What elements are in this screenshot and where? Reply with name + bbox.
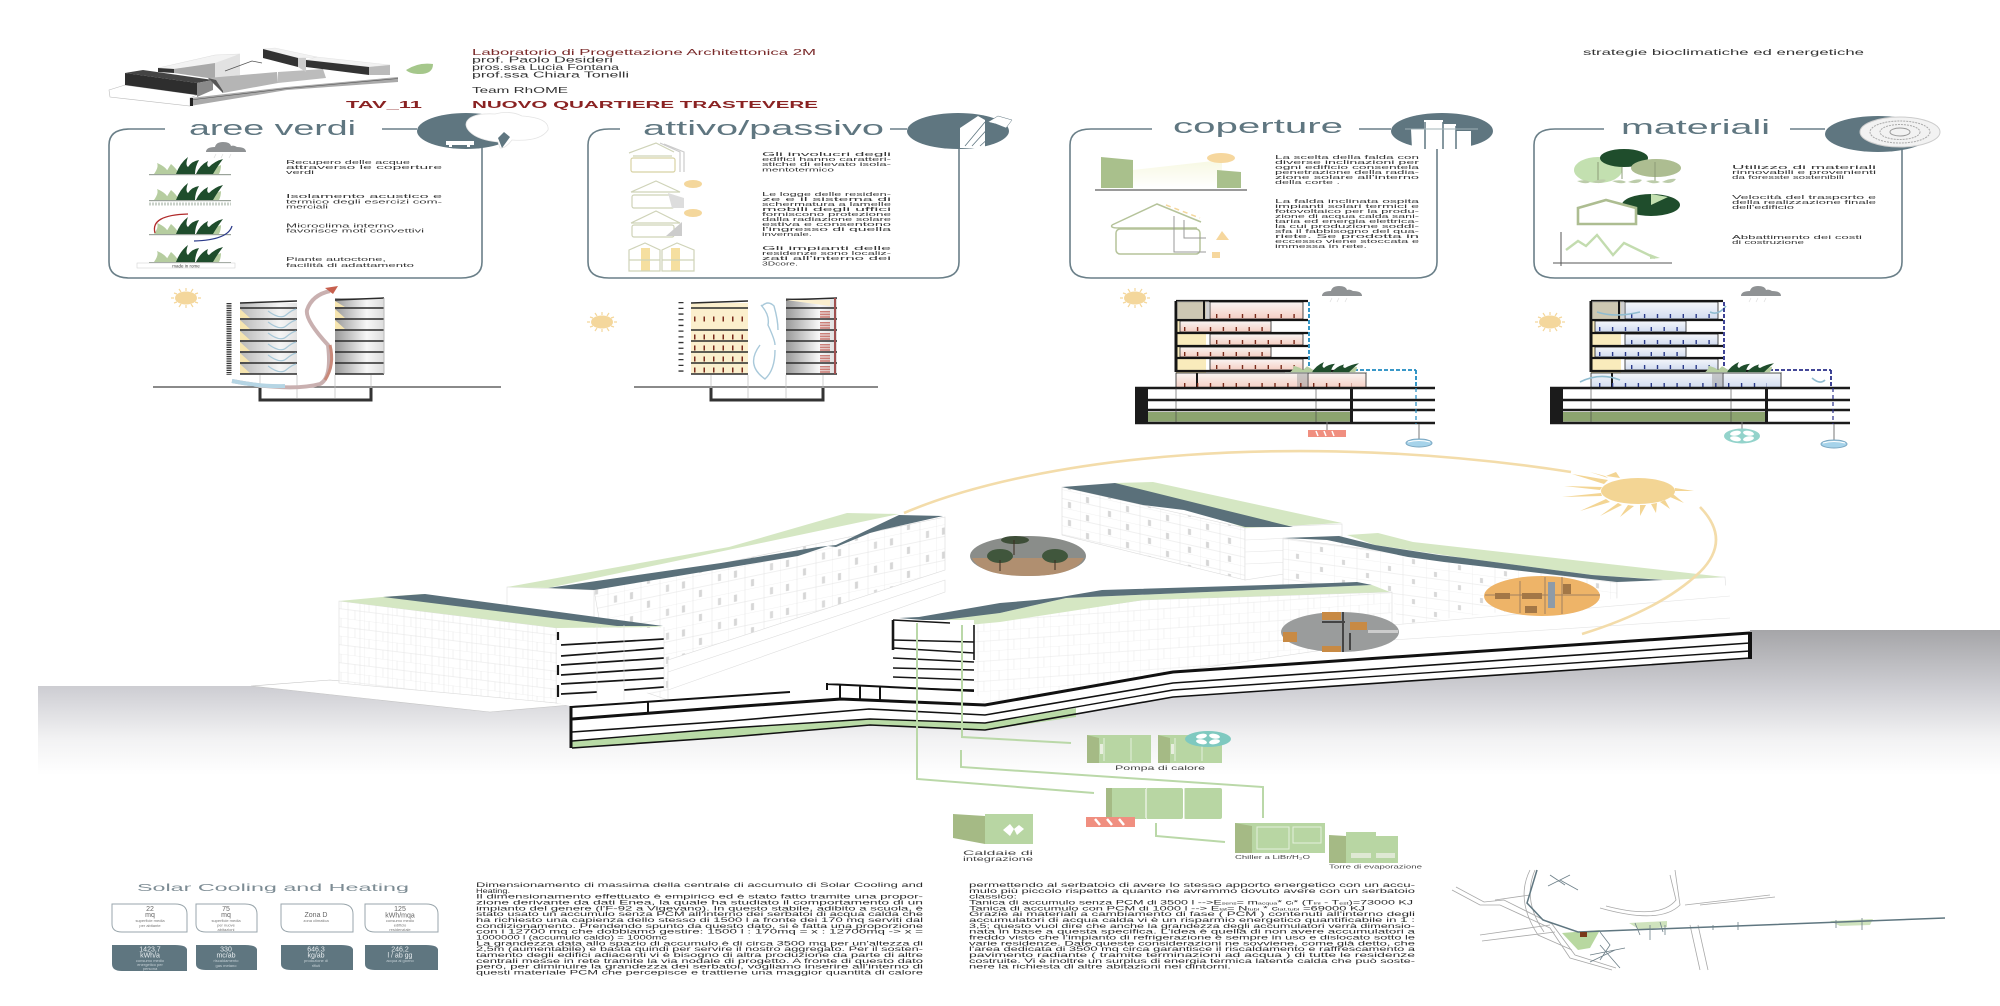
- icon: rain cloud: [206, 142, 246, 158]
- text: renewable materials: della realizzazione finale: [1732, 200, 1876, 206]
- inset: courtyard trees: [970, 536, 1086, 576]
- header: course and team credits: pros.ssa Lucia Fontana: [472, 62, 619, 72]
- text: green roofs: Microclima interno: [286, 224, 394, 230]
- text: envelope and plants: dalla radiazione solare: [762, 217, 891, 223]
- text: renewable materials: di costruzione: [1732, 240, 1804, 246]
- basement section: [571, 632, 1752, 748]
- header: course and team credits: Laboratorio di Progettazione Architettonica 2M: [472, 47, 816, 57]
- external louvres: [678, 302, 684, 376]
- text: green roofs: [286, 160, 443, 269]
- card: energy consumption: [112, 945, 187, 971]
- text column: storage sizing: Heating.: [476, 888, 510, 895]
- equipment: evaporation tower: Torre di evaporazione: [1329, 864, 1422, 870]
- card: energy consumption: consumo medio: [136, 958, 165, 963]
- green roof grass: [1285, 362, 1367, 373]
- text column: PCM benefits: nata in base a questa specifica. L'idea è quella di non avere accumulatori a: [969, 929, 1416, 936]
- title: NUOVO QUARTIERE TRASTEVERE: [472, 100, 819, 111]
- icon: solar house systems: [1112, 204, 1229, 258]
- indoor air flows: [268, 309, 296, 372]
- text: green roofs: favorisce moti convettivi: [286, 228, 424, 234]
- right block floors: [335, 298, 384, 374]
- text: roof pitches: diverse inclinazioni per: [1275, 160, 1420, 166]
- card: area per dwelling: 75: [222, 906, 230, 913]
- blue air flows: [1580, 306, 1825, 382]
- text column: PCM benefits: [969, 882, 1416, 971]
- equipment: evaporation tower: [1329, 832, 1422, 870]
- section: natural ventilation: [153, 286, 501, 400]
- text: green roofs: Isolamento acustico e: [286, 194, 442, 200]
- equipment: heat pump: Pompa di calore: [1115, 766, 1206, 772]
- text: envelope and plants: zati all'interno dei: [762, 256, 891, 262]
- icon: fan: [1724, 428, 1760, 444]
- equipment: absorption chiller: Chiller a LiBr/H₂O: [1235, 855, 1310, 861]
- card: area per inhabitant: mq: [145, 912, 155, 919]
- right block floors: [786, 298, 837, 374]
- text: envelope and plants: residenze sono localiz-: [762, 251, 892, 257]
- card: water: [365, 945, 438, 970]
- icon: courtyard sun penetration: [1095, 153, 1247, 191]
- main axonometric: buildings: [251, 482, 1752, 748]
- text column: PCM benefits: costruite. Vi è inoltre un surplus di energia termica latente calda che può soste-: [969, 958, 1415, 965]
- card: area per dwelling: superficie media: [211, 918, 241, 923]
- text: roof pitches: la cui produzione soddi-: [1275, 224, 1420, 230]
- section heading: strategie bioclimatiche ed energetiche: [1583, 47, 1865, 57]
- text: roof pitches: zione solare all'interno: [1275, 175, 1419, 181]
- text: envelope and plants: stiche di elevato isola-: [762, 162, 892, 168]
- card: climate zone: zona climatica: [303, 918, 329, 923]
- building E with podium: [893, 582, 1750, 705]
- text: green roofs: Piante autoctone,: [286, 257, 386, 263]
- card: climate zone: [281, 904, 353, 932]
- card: gas: mc/ab: [216, 952, 236, 960]
- icon: grass microclimate: [149, 214, 232, 241]
- text: envelope and plants: forniscono protezione: [762, 212, 891, 218]
- panel: coperture: [1070, 113, 1493, 278]
- sheet number: TAV_11: [346, 100, 423, 111]
- ground gradient band: [38, 630, 2000, 775]
- icon: sustainable forest: [1574, 149, 1681, 183]
- equipment: heat pump: [1087, 731, 1231, 772]
- text column: storage sizing: però, per diminuire la grandezza dei serbatoi, vogliamo inserire all'interno di: [476, 964, 923, 971]
- card: area per dwelling: abitazioni: [218, 927, 235, 932]
- text: roof pitches: sfa il fabbisogno del qua-: [1275, 229, 1420, 235]
- text: roof pitches: riete. Se prodotta in: [1275, 234, 1419, 240]
- card: area per inhabitant: 22: [146, 906, 154, 913]
- text: envelope and plants: schermatura a lamelle: [762, 202, 891, 208]
- card: water: acqua al giorno: [386, 958, 414, 963]
- header: course and team credits: prof. Paolo Desideri: [472, 54, 613, 64]
- text column: PCM benefits: mulo più piccolo rispetto a quanto ne avremmo dovuto avere con un serbatoio: [969, 888, 1416, 895]
- equipment: boilers: Caldaie di: [963, 851, 1033, 857]
- text: envelope and plants: 3Dcore.: [762, 262, 798, 268]
- left block floors: [691, 301, 748, 374]
- text column: storage sizing: impianto del genere (l'F-92 a Vigevano). In questo stabile, adibito a scuola, è: [476, 905, 924, 912]
- icon: grass with water: [149, 157, 231, 175]
- facade shutters: [226, 303, 232, 375]
- icon: roof and solar hand: [907, 113, 1012, 149]
- card: gas: riscaldamento: [214, 958, 239, 963]
- text: roof pitches: zione di acqua calda sani-: [1275, 214, 1420, 220]
- text column: storage sizing: zione derivante da dati Enea, la quale ha studiato il comportamento di un: [476, 900, 924, 906]
- panel: attivo/passivo: [588, 113, 1012, 278]
- text column: storage sizing: stato usato un accumulo senza PCM all'interno dei serbatoi di acqua calda che: [476, 911, 924, 918]
- icon: house and clock: [1578, 194, 1680, 224]
- heading: coperture: coperture: [1173, 116, 1343, 138]
- data cards: filled: [112, 945, 438, 971]
- header: course and team credits: prof.ssa Chiara Tonelli: [472, 70, 629, 80]
- icon: radiator: [1086, 817, 1135, 827]
- icon: native plants: [137, 245, 235, 268]
- text column: storage sizing: 1000000 l (accumulo caldo) = 1000mc: [476, 934, 667, 942]
- card: area per inhabitant: superficie media: [135, 918, 165, 923]
- card: area per dwelling: [196, 904, 257, 932]
- text: roof pitches: della corte .: [1275, 180, 1340, 186]
- text column: PCM benefits: Grazie ai materiali a cambiamento di fase ( PCM ) contenuti all'interno degli: [969, 911, 1415, 918]
- site map: district network: [1452, 870, 1945, 970]
- card: area per inhabitant: per abitante: [139, 923, 161, 928]
- icon: grass insulation: [149, 183, 231, 204]
- text: roof pitches: La scelta della falda con: [1275, 155, 1419, 161]
- text: roof pitches: [1275, 155, 1420, 250]
- card: building consumption: 125: [394, 906, 406, 913]
- card: area per dwelling: mq: [221, 912, 231, 919]
- card: energy consumption: energetico per: [137, 962, 163, 967]
- text: green roofs: termico degli esercizi com-: [286, 200, 443, 206]
- text column: storage sizing: [476, 882, 924, 976]
- header: course and team credits: Team RhOME: [472, 85, 569, 95]
- underground parking: [1550, 387, 1850, 423]
- text column: PCM benefits: classico:: [969, 894, 1018, 901]
- text: roof pitches: La falda inclinata ospita: [1275, 199, 1419, 205]
- text: roof pitches: ogni edificio consentela: [1275, 165, 1419, 171]
- card: waste: produzione di: [304, 958, 328, 963]
- card: building consumption: residenziale: [389, 927, 411, 932]
- text: roof pitches: impianti solari termici e: [1275, 204, 1419, 210]
- text column: storage sizing: Il dimensionamento effettuato è empirico ed è stato fatto tramite una propor-: [476, 894, 923, 901]
- icon: fan: [1185, 731, 1231, 747]
- text: renewable materials: Abbattimento dei costi: [1732, 235, 1862, 241]
- cooled rooms: [1591, 302, 1781, 388]
- text: green roofs: merciali: [286, 204, 328, 210]
- text column: PCM benefits: permettendo al serbatoio di avere lo stesso apporto energetico con un accu-: [969, 882, 1415, 889]
- icon: tree rings: [1825, 116, 1940, 152]
- text: envelope and plants: Le logge delle residen-: [762, 192, 892, 198]
- icon: radiator: [1308, 430, 1346, 437]
- building B: [507, 513, 945, 700]
- text: roof pitches: penetrazione della radia-: [1275, 170, 1420, 176]
- text column: PCM benefits: nere la richiesta di altre abitazioni nei dintorni.: [969, 964, 1232, 971]
- heading: attivo/passivo: attivo/passivo: [643, 118, 884, 140]
- icon: water tank: [1821, 440, 1847, 448]
- header: course and team credits: [472, 47, 816, 95]
- heading: Solar Cooling and Heating: Solar Cooling and Heating: [137, 882, 409, 894]
- text: envelope and plants: mobili degli uffici: [762, 207, 891, 213]
- rainwater pipe: [1724, 302, 1831, 387]
- text column: storage sizing: tamento degli edifici adiacenti vi è bisogno di altra produzione da parte di altre: [476, 952, 924, 959]
- green roof grass: [1700, 362, 1782, 373]
- card: gas: 330: [220, 946, 232, 954]
- section: winter heating: [1120, 286, 1435, 447]
- equipment: boilers: integrazione: [963, 857, 1034, 863]
- text column: PCM benefits: 3,5; questo vuol dire che anche la grandezza degli accumulatori verrà dimensio-: [969, 923, 1415, 930]
- text: renewable materials: rinnovabili e provenienti: [1732, 170, 1876, 176]
- text: envelope and plants: Gli impianti delle: [762, 246, 891, 252]
- equipment: boilers: [953, 814, 1034, 863]
- heated rooms: [1176, 302, 1366, 388]
- text: renewable materials: Velocità del trasporto e: [1732, 195, 1876, 201]
- text: green roofs: Recupero delle acque: [286, 160, 410, 166]
- section: summer cooling: [1535, 286, 1850, 448]
- card: climate zone: Zona D: [305, 912, 327, 919]
- icon: loggia house with sun: [631, 180, 702, 208]
- text column: storage sizing: La grandezza data allo spazio di accumulo è di circa 3500 mq per un'altezza di: [476, 940, 923, 947]
- data cards: outlined: [112, 904, 438, 932]
- text column: storage sizing: centrali messe in rete tramite la via nodale di progetto. A fronte di questo dato: [476, 958, 924, 965]
- card: waste: kg/ab: [307, 952, 325, 960]
- rainwater pipe: [1309, 302, 1416, 387]
- text: renewable materials: dell'edificio: [1732, 205, 1794, 211]
- icon: sun: [1562, 472, 1694, 517]
- card: building consumption: edificio: [394, 922, 407, 928]
- card: area per dwelling: per nuove: [217, 922, 236, 928]
- text: roof pitches: fotovoltaico per la produ-: [1275, 209, 1420, 215]
- icon: insulated house: [629, 143, 684, 172]
- text: envelope and plants: Gli involucri degli: [762, 152, 891, 158]
- icon: water tank: [1406, 439, 1432, 447]
- text: green roofs: attraverso le coperture: [286, 165, 442, 171]
- building C: [1062, 482, 1342, 580]
- icon: roofs skyline: [1391, 113, 1493, 149]
- panel: aree verdi: [109, 112, 548, 278]
- text column: storage sizing: 2,5m (aumentabile) e basta quindi per servire il nostro aggregato. Per il sosten-: [476, 946, 923, 953]
- text column: PCM benefits: freddo visto che l'impianto di refrigerazione è sempre in uso e dislocato sotto le: [969, 934, 1416, 942]
- icon: louvre house with sun: [631, 209, 702, 237]
- text: envelope and plants: mentotermico: [762, 168, 834, 174]
- section: radiant panels: [587, 298, 878, 400]
- text column: PCM benefits: Tanica di accumulo con PCM di 1000 l --> E lat = N tubi * c lat.tubi =69000 KJ: [969, 905, 1365, 912]
- sun path arc: [904, 451, 1716, 634]
- heading: materiali: materiali: [1621, 117, 1770, 139]
- text column: storage sizing: condizionamento. Prendendo spunto da questo dato, si è fatta una proporzione: [476, 923, 924, 930]
- inset: gray roof plan: [1281, 612, 1399, 652]
- card: energy consumption: 1423,7: [139, 946, 161, 954]
- text column: PCM benefits: l'area dedicata di 3500 mq circa garantisce il riscaldamento e raffrescamento a: [969, 946, 1416, 953]
- text column: storage sizing: ha richiesto una capienza dello stesso di 1500 l a fronte dei 170 mq serviti dal: [476, 917, 923, 924]
- inset: orange facade: [1484, 576, 1600, 616]
- icon: falling cost chart: [1553, 232, 1672, 266]
- text: roof pitches: taria ed energia elettrica-: [1275, 219, 1420, 225]
- text column: PCM benefits: accumulatori di acqua calda vi è un risparmio energetico quantificabile in 1 :: [969, 917, 1416, 924]
- left block floors: [240, 301, 297, 374]
- card: waste: 646,3: [307, 946, 325, 954]
- text: envelope and plants: invernale.: [762, 232, 812, 238]
- card: water: l / ab gg: [388, 952, 413, 960]
- text column: PCM benefits: pavimento radiante ( tramite terminazioni ad acqua ) di tutte le residenze: [969, 952, 1416, 959]
- text column: PCM benefits: varie residenze. Date queste considerazioni ne sovviene, come già detto, che: [969, 940, 1416, 947]
- text: renewable materials: [1732, 165, 1876, 246]
- underground parking: [1135, 387, 1435, 423]
- card: building consumption: consumo medio: [386, 918, 415, 923]
- text: renewable materials: Utilizzo di materiali: [1732, 165, 1876, 171]
- card: building consumption: [365, 904, 438, 932]
- text: envelope and plants: [762, 152, 892, 268]
- equipment: absorption chiller: [1235, 823, 1325, 861]
- card: building consumption: kWh/mqa: [385, 912, 415, 920]
- distribution pipes: [917, 623, 1263, 842]
- text: green roofs: verdi: [286, 170, 314, 176]
- icon: native plants: made in rome: [172, 263, 200, 268]
- card: energy consumption: persona: [143, 966, 158, 971]
- card: waste: [281, 945, 353, 970]
- icon: houses with 3D core: [629, 243, 694, 271]
- heading: aree verdi: aree verdi: [189, 118, 356, 140]
- stack effect air flow arrow: [232, 286, 338, 387]
- text column: storage sizing: con i 12700 mq che dobbiamo gestire: 1500 l : 170mq = x : 12700mq -> x =: [476, 929, 924, 936]
- panel: materiali: [1534, 116, 1940, 278]
- text: roof pitches: eccesso viene stoccata e: [1275, 239, 1419, 245]
- core air flow: [754, 303, 778, 379]
- card: waste: rifiuti: [312, 963, 320, 968]
- text: envelope and plants: edifici hanno caratteri-: [762, 157, 892, 163]
- equipment: storage tanks: [1086, 788, 1222, 827]
- icon: leaf: [406, 64, 433, 74]
- text: renewable materials: da foresste sostenibili: [1732, 175, 1844, 181]
- header: 3D massing thumbnail: [109, 48, 433, 106]
- text: envelope and plants: l'ingresso di quella: [762, 227, 891, 233]
- card: area per inhabitant: [112, 904, 187, 932]
- text column: storage sizing: questi materiale PCM che percepisce e trattiene una maggior quantità di calore: [476, 970, 924, 976]
- icon: tree and bench: [417, 112, 548, 149]
- text: roof pitches: immessa in rete.: [1275, 244, 1367, 250]
- building D: [1283, 533, 1728, 640]
- text column: storage sizing: Dimensionamento di massima della centrale di accumulo di Solar Cooling and: [476, 882, 924, 889]
- card: gas: [196, 945, 257, 970]
- building A: [251, 594, 664, 712]
- text: green roofs: facilità di adattamento: [286, 263, 414, 269]
- text: envelope and plants: estiva e consentono: [762, 222, 891, 228]
- card: energy consumption: kWh/a: [140, 952, 160, 960]
- text: envelope and plants: ze e il sistema di: [762, 197, 891, 203]
- card: gas: gas metano: [216, 963, 237, 968]
- card: water: 246,2: [391, 946, 409, 954]
- text column: PCM benefits: Tanica di accumulo senza PCM di 3500 l -->E sens = m acqua * c l* (T ini - T est )=73000 KJ: [969, 900, 1413, 906]
